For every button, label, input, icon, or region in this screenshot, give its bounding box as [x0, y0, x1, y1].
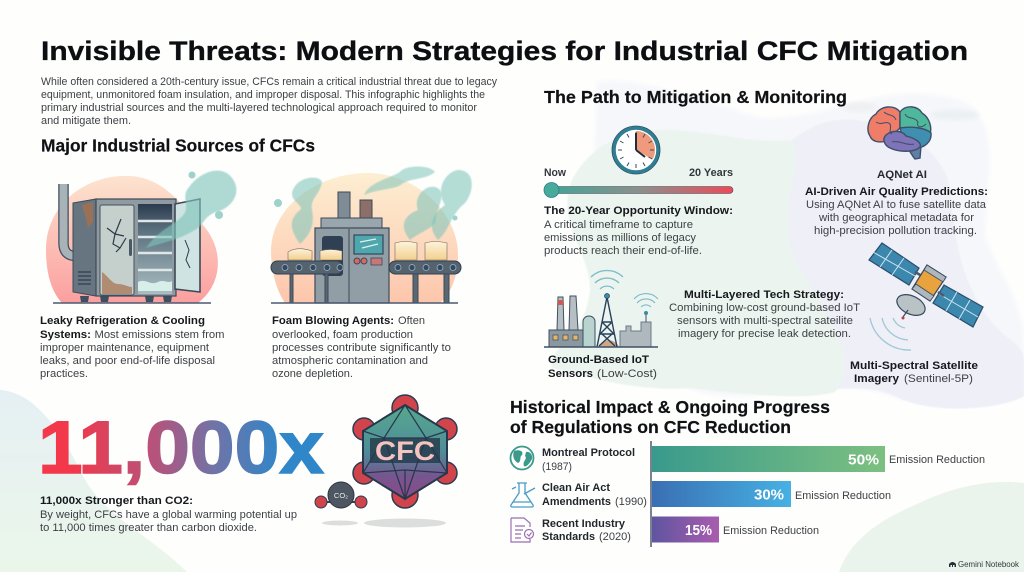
caption: stronger than CO2: to 11,000 times greater than carbon dioxide.: [40, 522, 257, 534]
row: Montreal Protocol: (1987): [542, 461, 572, 473]
panel: leaky refrigeration: [40, 171, 236, 380]
heading: major sources: Major Industrial Sources of CFCs: [41, 136, 315, 156]
illustration: foam machine: [271, 166, 472, 303]
panel: AQNet AI: [805, 107, 988, 237]
caption: foam blowing: Often: [398, 315, 425, 327]
row: Montreal Protocol: Montreal Protocol: [542, 447, 635, 459]
caption: AQNet: Using AQNet AI to fuse satellite data: [806, 199, 987, 211]
panel: AQNet AI: AQNet AI: [877, 169, 927, 181]
chart: regulations bar chart: [510, 441, 985, 547]
caption: AQNet: AI-Driven Air Quality Predictions:: [805, 186, 988, 198]
caption: foam blowing: [272, 315, 451, 380]
icon: flask: [511, 483, 535, 507]
icon: CO2 molecule: [315, 482, 367, 508]
caption: leaky refrigeration: Most emissions stem from: [94, 329, 224, 341]
heading: path to mitigation: The Path to Mitigation & Monitoring: [544, 87, 847, 107]
caption: foam blowing: processes contribute significantly to: [272, 342, 451, 354]
illustration: leaky refrigerator: [46, 171, 236, 303]
row: Recent Industry Standards: [511, 516, 819, 543]
title: Invisible Threats: Modern Strategies for Industrial CFC Mitigation: [41, 36, 968, 66]
caption: opportunity window: emissions as millions of legacy: [544, 232, 696, 244]
caption: leaky refrigeration: [40, 315, 224, 380]
caption: stronger than CO2: [40, 495, 297, 534]
caption: ground sensors: Ground-Based IoT: [548, 354, 649, 366]
caption: satellite: Multi-Spectral Satellite: [850, 360, 978, 372]
timeline: 20-year opportunity window: Now: [544, 167, 566, 179]
intro text: equipment, unmonitored foam insulation, and improper disposal. This infographic highlights the: [41, 89, 485, 101]
caption: opportunity window: A critical timeframe to capture: [544, 219, 693, 231]
caption: opportunity window: products reach their end-of-life.: [544, 245, 702, 257]
caption: opportunity window: The 20-Year Opportunity Window:: [544, 205, 733, 217]
caption: AQNet: high-precision pollution tracking.: [814, 225, 977, 237]
caption: ground sensors: [548, 354, 657, 380]
icon: document with check: [511, 518, 534, 542]
caption: leaky refrigeration: leaks, and poor end-of-life disposal: [40, 355, 215, 367]
intro text: [41, 76, 497, 127]
row: Recent Industry Standards: Standards: [542, 531, 595, 543]
big number: 11,000x: 11,000x: [38, 406, 324, 489]
row: Montreal Protocol: 50%: [848, 452, 879, 468]
caption: foam blowing: overlooked, foam production: [272, 329, 413, 341]
timeline: 20-year opportunity window: 20 Years: [689, 167, 733, 179]
caption: multi-layered tech strategy: Combining low-cost ground-based IoT: [669, 302, 860, 314]
row: Clean Air Act: [511, 481, 891, 508]
caption: leaky refrigeration: improper maintenance, equipment: [40, 342, 210, 354]
row: Clean Air Act: (1990): [615, 496, 647, 508]
icon: CFC molecule: [315, 395, 457, 528]
caption: satellite: Imagery: [854, 373, 900, 385]
caption: foam blowing: Foam Blowing Agents:: [272, 315, 394, 327]
row: Clean Air Act: Amendments: [542, 496, 611, 508]
caption: AQNet: with geographical metadata for: [818, 212, 974, 224]
intro text: and mitigate them.: [41, 115, 131, 127]
caption: ground sensors: Sensors: [548, 368, 593, 380]
caption: foam blowing: atmospheric contamination and: [272, 355, 428, 367]
caption: foam blowing: ozone depletion.: [272, 368, 353, 380]
row: Recent Industry Standards: 15%: [685, 522, 712, 539]
icon: CFC molecule: CFC: [375, 436, 435, 466]
caption: satellite: [850, 360, 978, 385]
intro text: While often considered a 20th-century issue, CFCs remain a critical industrial threat due to legacy: [41, 76, 497, 88]
footer: Gemini Notebook: Gemini Notebook: [958, 560, 1020, 569]
caption: multi-layered tech strategy: [669, 289, 860, 340]
icon: satellite: [869, 243, 983, 350]
icon: factory and sensor towers: [544, 271, 658, 347]
row: Recent Industry Standards: Recent Industry: [542, 518, 626, 530]
caption: leaky refrigeration: Leaky Refrigeration & Cooling: [40, 315, 205, 327]
caption: multi-layered tech strategy: imagery for precise leak detection.: [678, 328, 851, 340]
icon: CO2 molecule: CO₂: [334, 491, 348, 500]
row: Clean Air Act: 30%: [754, 486, 784, 504]
intro text: primary industrial sources and the multi-layered technological approach required to monitor: [41, 102, 477, 114]
row: Clean Air Act: Emission Reduction: [795, 490, 891, 502]
icon: brain: [868, 107, 931, 159]
row: Montreal Protocol: Emission Reduction: [889, 454, 985, 466]
row: Clean Air Act: Clean Air Act: [542, 482, 610, 494]
caption: stronger than CO2: 11,000x Stronger than CO2:: [40, 495, 193, 507]
slider bar: [544, 182, 733, 198]
caption: leaky refrigeration: Systems:: [40, 329, 91, 341]
caption: AQNet: [805, 186, 988, 237]
row: Recent Industry Standards: (2020): [599, 531, 631, 543]
icon: globe: [510, 446, 534, 470]
row: Montreal Protocol: [510, 446, 985, 473]
heading: historical impact: of Regulations on CFC Reduction: [510, 417, 791, 437]
caption: multi-layered tech strategy: Multi-Layered Tech Strategy:: [684, 289, 844, 301]
caption: stronger than CO2: By weight, CFCs have a global warming potential up: [40, 509, 297, 521]
panel: satellite: [850, 243, 983, 385]
caption: satellite: (Sentinel-5P): [904, 373, 973, 385]
row: Recent Industry Standards: Emission Reduction: [723, 525, 819, 537]
heading: historical impact: Historical Impact & Ongoing Progress: [510, 397, 830, 417]
caption: opportunity window: [544, 205, 733, 257]
caption: leaky refrigeration: practices.: [40, 368, 88, 380]
icon: clock: [612, 126, 660, 174]
caption: multi-layered tech strategy: sensors with multi-spectral sateilite: [677, 315, 853, 327]
timeline: 20-year opportunity window: [544, 126, 733, 257]
caption: ground sensors: (Low-Cost): [597, 368, 657, 380]
panel: foam blowing: [271, 166, 472, 380]
panel: ground sensors: [544, 271, 658, 380]
heading: historical impact: [510, 397, 830, 437]
